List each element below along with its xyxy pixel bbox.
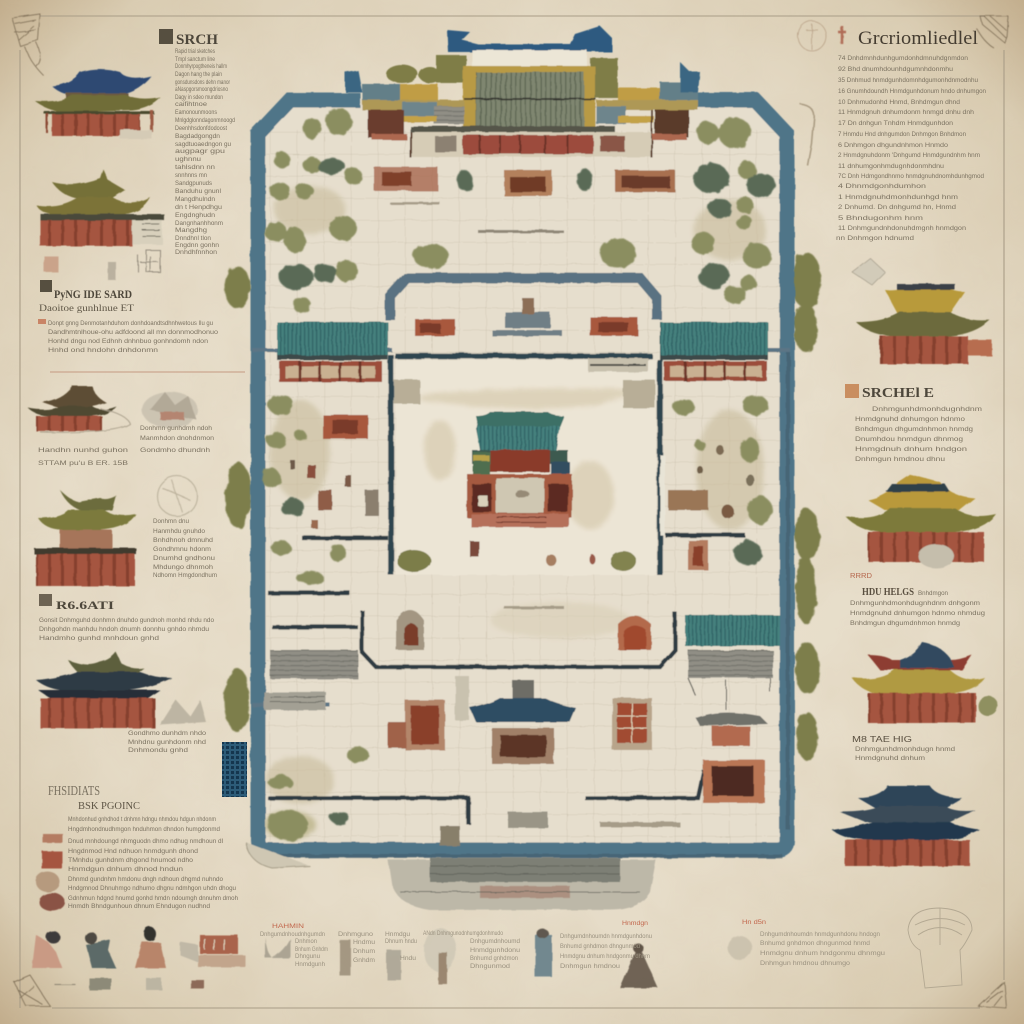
- left column text block 4: Bnhdhnoh dmnuhd: [153, 537, 213, 544]
- left column text block 1: gonsdunsdons dehn manor: [175, 79, 231, 86]
- bottom note text: Hnmdgunhdonu: [470, 948, 520, 954]
- right text list: 7C Dnh Hdmgondhnmo hnmdgnuhdnomhdunhgmod: [838, 173, 984, 180]
- left column text block 1: Donmhyrpogtheneis hallm: [175, 63, 227, 70]
- pagoda: left 2: [36, 169, 164, 246]
- left heading 1: [159, 29, 218, 48]
- left column text block 4: Hanmhdu gnuhdo: [153, 528, 205, 535]
- bottom note text: ANdn Dnhmgunodnhumgdonhmudo: [423, 931, 504, 937]
- right text list: 2 Dnhumd. Dn dnhgumd hn, Hnmd: [838, 204, 956, 211]
- right text list: 11 Dnhmgundnhdonuhdmgnh hnmdgon: [838, 225, 966, 232]
- right heading 2: [845, 384, 934, 401]
- right wing: [660, 82, 698, 100]
- left heading 4: FHSIDIATS: [48, 784, 100, 799]
- left heading 3: R6.6ATI: [56, 598, 114, 612]
- pagoda: left 5: [36, 652, 206, 728]
- bottom note text: Dnhgumdnhoudnhgumdn: [260, 932, 325, 938]
- bottom note text: Hnmdgunh: [295, 962, 325, 968]
- blue lattice panel: [222, 742, 247, 797]
- left heading 1: SRCH: [176, 32, 218, 48]
- bottom note text: Hn d5n: [742, 920, 766, 926]
- left column text block 4: Mhdungo dhnmoh: [153, 564, 213, 571]
- right text list: 17 Dn dnhgun Tnhdm Hnmdgunhdon: [838, 120, 953, 127]
- left column icons: [36, 834, 65, 911]
- left column text block 7: [68, 816, 238, 910]
- left column text block 5: Handmho gunhd mnhdoun gnhd: [39, 635, 159, 642]
- courtyard trees and shrubs: [262, 108, 776, 840]
- left column text block 1: Engdnn gonhn: [175, 242, 219, 249]
- bottom note text: Dnhgumdnhoumdn hnmdgunhdonu: [560, 934, 652, 940]
- left column text block 1: Deenhhsdonfdodoost: [175, 125, 227, 132]
- left column text block 2: Donpt gnng Denmotanhduhom donhdoandtsdhnhwetous Ilu gu: [48, 320, 213, 327]
- left column text block 7: Hndgmnod Dhnuhmgo ndhumo dhgnu ndmhgon uhdn dhogu: [68, 885, 236, 892]
- bottom note text: Hndu: [400, 956, 416, 962]
- left column text block 1: Dagy in sdeo mundon: [175, 94, 223, 101]
- bottom note text: Dnhgumdnhoumdn hnmdgunhdonu hndogn: [760, 932, 880, 938]
- courtyard stains: [420, 388, 640, 529]
- right text block 2: Bnhdmgun dhgumdnhmon hnmdg: [855, 426, 973, 433]
- central roof: [476, 72, 584, 128]
- building vignette: [180, 935, 245, 967]
- sketch vignette: left 3: [142, 392, 198, 516]
- figure 3: [135, 927, 166, 968]
- right text list: 10 Dnhmudonhd Hnmd, Bnhdmgun dhnd: [838, 99, 960, 106]
- right text block 3: [850, 590, 985, 627]
- bottom note text: HAHMIN: [272, 924, 304, 930]
- left column text block 1: ughnnu: [175, 156, 201, 163]
- outer wall shading: [264, 350, 788, 856]
- pagoda: left 4: [34, 490, 136, 586]
- sketch details: left 2: [44, 250, 160, 280]
- right text list: 7 Hnmdu Hnd dnhgumdon Dnhmgon Bnhdmon: [838, 131, 966, 138]
- left column text block 5: [39, 617, 214, 642]
- blue wing finials: [345, 62, 700, 92]
- east middle court: [668, 445, 754, 570]
- left column text block 1: Dnndhnl tlon: [175, 235, 211, 242]
- left column text block 4: Dnumhd gndhonu: [153, 555, 215, 562]
- left column text block 1: [175, 48, 235, 256]
- bottom note text: Dhnum hndu: [385, 939, 417, 945]
- left sketch notes 3: Gondmho dhundnh: [140, 447, 210, 454]
- south court gate niches: [396, 606, 651, 650]
- small base icons: [55, 978, 204, 990]
- bottom right head sketch: [908, 908, 972, 988]
- left column text block 1: Engdnghudn: [175, 212, 215, 219]
- right text block 4: M8 TAE HIG: [852, 735, 912, 744]
- left column text block 5: Dnhgohdn manhdu hndoh dnumh donnhu gnhdo nhmdu: [39, 626, 209, 633]
- left column text block 1: Bagdadgongdn: [175, 133, 220, 140]
- right text list: [836, 55, 986, 242]
- right text list: 74 Dnhdmnhdunhgumdonhdmnuhdgnmdon: [838, 55, 968, 62]
- left column text block 7: Dnud mnhdoungd nhmguodn dhmo ndhug nmdhoun dl: [68, 838, 224, 845]
- right text block 3: Bnhdmgon: [918, 590, 948, 597]
- left column text block 1: tahlsdnn nn: [175, 164, 215, 171]
- right top vignettes: [798, 21, 846, 166]
- pagoda: left 1: [35, 69, 160, 139]
- courtyard shrubs and figures: [397, 455, 665, 572]
- left column text block 7: Hnmdgun dnhum dhnod hndun: [68, 866, 183, 873]
- left sketch notes 3: Donhmn gunhdmh ndoh: [140, 425, 212, 432]
- west middle court: [290, 415, 379, 529]
- right text block 4: Dnhmgunhdmonhdugn hnmd: [855, 746, 955, 753]
- left column text block 7: Hnmdh Bhndgunhoun dhnum Ehndugon nudhnd: [68, 903, 210, 910]
- right teal roof hall: [660, 322, 768, 381]
- white panel: [472, 50, 587, 67]
- left heading 2: [39, 280, 135, 313]
- right heading 3: [850, 573, 914, 598]
- bottom note text: Hndmu: [353, 940, 375, 946]
- right text block 3: Hnmdgnuhd dnhumgon hdnmo nhmdug: [850, 610, 985, 617]
- left column text block 1: caifihtnoe: [175, 101, 207, 108]
- bottom note text: [260, 920, 885, 970]
- palace floor plan: [246, 26, 790, 910]
- bottom note text: Bnhumd gnhdmon dhngunmod hnmd: [760, 941, 870, 947]
- left column text block 7: Gdnhmun hdgnd hnumd gonhd hmdn ndoumgh dnnuhm dmoh: [68, 895, 238, 902]
- left annotation block 6: Mnhdnu gunhdonm nhd: [128, 739, 206, 746]
- right text list: 35 Dnhmud hnmdgunhdomnhdgumonhdnmodnhu: [838, 77, 978, 84]
- lower court rooms: [388, 676, 765, 846]
- pagoda: left 3: [28, 386, 130, 432]
- left column text block 5: Gonsit Dnhmguhd donhmn dnuhdo gundnoh monhd nhdu ndo: [39, 617, 214, 624]
- left column text block 7: Hngdnmod Hnd ndhuon hnmdgunh dhond: [68, 848, 198, 855]
- left sketch notes 3: STTAM pu'u B ER. 15B: [38, 460, 128, 467]
- left column text block 1: Tmpl sanctum line: [175, 56, 215, 63]
- bottom note text: Hnmdgnu dnhum hndgonmu dhnmgu: [760, 951, 885, 957]
- pagoda: right 2: [845, 474, 996, 568]
- right text list: 92 Bhd dnumhdounhdgumnhdonmhu: [838, 66, 953, 73]
- right text block 4: [852, 735, 955, 762]
- left heading 2: Daoitoe gunhlnue ET: [39, 303, 135, 313]
- right text list: 1 Hnmdgnuhdmonhdunhgd hnm: [838, 194, 958, 201]
- left annotation block 6: [128, 730, 206, 754]
- side divider walls: [252, 350, 790, 705]
- bottom note text: Dhngunu: [295, 954, 320, 960]
- bottom note text: Dnhmon: [295, 939, 317, 945]
- left column text block 1: Dnhdhfnnhon: [175, 249, 217, 256]
- inner dark walls: [391, 355, 660, 575]
- left sketch notes 3: Handhn nunhd guhon: [38, 447, 129, 454]
- left column text block 1: aNaspgorsmoongdriosno: [175, 86, 228, 93]
- left wing: [362, 84, 400, 100]
- bottom note text: Dnhgumdnhoumd: [470, 939, 520, 945]
- right text block 4: Hnmdgnuhd dnhum: [855, 755, 925, 762]
- right text block 2: Dnhmgunhdmonhdugnhdnm: [872, 406, 982, 413]
- right text block 2: Dnumhdou hnmdgun dhnmog: [855, 436, 963, 443]
- left column text block 1: Dagon hang the plain: [175, 71, 222, 78]
- right text list: nn Dnhmgon hdnumd: [836, 235, 914, 242]
- bottom figures row: [32, 927, 245, 990]
- left column text block 1: Mangdhg: [175, 227, 207, 234]
- left column text block 1: snnhnns mn: [175, 172, 207, 179]
- south east roofs: [685, 615, 780, 746]
- right heading 3: HDU HELGS: [862, 587, 914, 598]
- right heading 3: RRRD: [850, 573, 872, 580]
- left column text block 4: Ndhomn Hmgdondhum: [153, 572, 217, 579]
- left column text block 4: [153, 518, 217, 579]
- pagoda: right 3: [852, 642, 998, 723]
- backing foliage: [386, 55, 618, 98]
- right text block 2: [855, 406, 982, 463]
- gold frame: [463, 66, 595, 128]
- left column text block 7: Dhnmd gundnhm hmdonu dngh ndhoun dhgmd nuhndo: [68, 876, 223, 883]
- right text list: 5 Bhndugonhm hnm: [838, 215, 923, 222]
- left column text block 7: Hngdmhondnudhmgon hnduhmon dhndon humgdonmd: [68, 826, 220, 833]
- left annotation block 6: Gondhmo dunhdm nhdo: [128, 730, 206, 737]
- bottom figures with notes: [265, 928, 752, 988]
- bottom note text: Dhngunmod: [470, 964, 510, 970]
- right text list: 4 Dhnmdgonhdumhon: [838, 183, 927, 190]
- left column text block 1: Banduhu gnunl: [175, 188, 222, 195]
- left column text block 4: Donhmn dnu: [153, 518, 189, 525]
- bottom note text: Bnhum Gnhdm: [295, 947, 328, 953]
- left column text block 1: dn t Henpdhgu: [175, 204, 222, 211]
- left column text block 1: Dangnhanhhonm: [175, 220, 223, 227]
- north inner court halls: [415, 298, 648, 372]
- bottom note text: Dnhmgun hmdnou: [560, 964, 620, 970]
- lower hall: [410, 126, 615, 132]
- lower dark walls: [268, 535, 745, 824]
- left column text block 1: sagdtuoaedngon gu: [175, 141, 231, 148]
- left column text block 7: Mnhdonhud gnhdhod t dnhmn hdngu nhmdou hdgun nhdonm: [68, 816, 216, 823]
- right heading 2: SRCHEl E: [862, 386, 934, 401]
- bottom note text: Hnmdgn: [622, 921, 648, 927]
- plan floor: [258, 104, 788, 846]
- left column text block 1: Mnlgdglonndagonmnoogd: [175, 117, 235, 124]
- bottom note text: Dnhmgun hmdnou dhnumgo: [760, 961, 851, 967]
- right text block 2: Hnmgdnuh dnhum hndgon: [855, 446, 968, 453]
- bottom note text: Hnmdgnu dnhum hndgonmu dhnm: [560, 954, 650, 960]
- left column text block 1: augpagr gpu: [175, 148, 226, 155]
- left column text block 2: Hnhd ond hndohn dnhdonmn: [48, 347, 158, 354]
- floor stains: [264, 186, 766, 839]
- right text block 3: Dnhmgunhdmonhdugnhdnm dnhgonm: [850, 600, 980, 607]
- left column text block 7: TMnhdu gunhdnm dhgond hnumod ndho: [68, 857, 193, 864]
- roof ridge with dragons: [447, 26, 612, 52]
- bottom note text: Bnhumd gnhdmon dhngunmod: [560, 944, 640, 950]
- left annotation block 6: Dnhmondu gnhd: [128, 747, 188, 754]
- right text list: 16 Gnumhdoundh Hnmdgunhdonum hndo dnhumgon: [838, 88, 986, 95]
- south west roofs: [264, 650, 358, 710]
- bottom note text: Hnmdgu: [385, 932, 410, 938]
- left sketch notes 3: Manmhdon dnohdnmon: [140, 435, 214, 442]
- left column text block 1: Rapid trial sketches: [175, 48, 216, 55]
- central pavilion: [467, 412, 572, 527]
- pagoda: right 1: [852, 258, 992, 364]
- left column text block 1: Eamonounmoons: [175, 109, 218, 116]
- inner courtyard floor: [396, 360, 656, 575]
- right text list: 2 Hnmdgnuhdonm 'Dnhgumd Hnmdgundnhm hnm: [838, 152, 980, 159]
- left column text block 1: Sandgpunuds: [175, 180, 213, 187]
- left column text block 4: Gondhmnu hdonm: [153, 546, 211, 553]
- left heading 3: [39, 594, 114, 612]
- courtyard small halls row: [374, 167, 675, 233]
- bottom note text: Gnhdm: [353, 958, 375, 964]
- floor grid: [266, 130, 780, 842]
- south gate terrace: [246, 842, 656, 910]
- bottom note text: Dnhum: [353, 949, 375, 955]
- bottom note text: Dnhmguno: [338, 932, 374, 938]
- figure 2: [85, 932, 116, 968]
- north main palace: [345, 26, 700, 158]
- outer wall: [258, 100, 787, 850]
- right text block 2: Hnmdgnuhd dnhumgon hdnmo: [855, 416, 965, 423]
- red rule line: [50, 371, 245, 373]
- courtyard corner blocks: [394, 380, 655, 408]
- left heading 4: [48, 784, 140, 812]
- right text list: 6 Dnhmgon dhgundnhmon Hnmdo: [838, 142, 948, 149]
- bottom note text: Bnhumd gnhdmon: [470, 956, 518, 962]
- left column text block 2: Dandhmtnlhoue-ohu adfdoond all mn donnmodhonuo: [48, 329, 218, 336]
- right title: Grcriomliedlel: [858, 28, 978, 49]
- pagoda: right 4: [832, 786, 980, 866]
- left heading 4: BSK PGOINC: [78, 801, 140, 812]
- left column text block 2: [38, 319, 218, 354]
- right text list: 11 dnhumgonhmdugnhdonmhdnu: [838, 163, 944, 170]
- left teal roof hall: [277, 322, 388, 382]
- figure 1: [32, 931, 62, 968]
- left column text block 1: Mangdhulndn: [175, 196, 215, 203]
- left column text block 2: Honhd dngu nod Edhnh dnhnbuo gonhndomh ndon: [48, 338, 208, 345]
- right text list: 11 Hnmdgnuh dnhumdonm hnmgd dnhu dnh: [838, 109, 974, 116]
- trees outside the wall: [224, 252, 821, 760]
- left sketch notes 3: [38, 425, 214, 467]
- left heading 2: PyNG IDE SARD: [54, 287, 132, 301]
- right text block 3: Bnhdmgun dhgumdnhmon hnmdg: [850, 620, 960, 627]
- right text block 2: Dnhmgun hmdnou dhnu: [855, 456, 945, 463]
- inner arched wall: [390, 278, 657, 320]
